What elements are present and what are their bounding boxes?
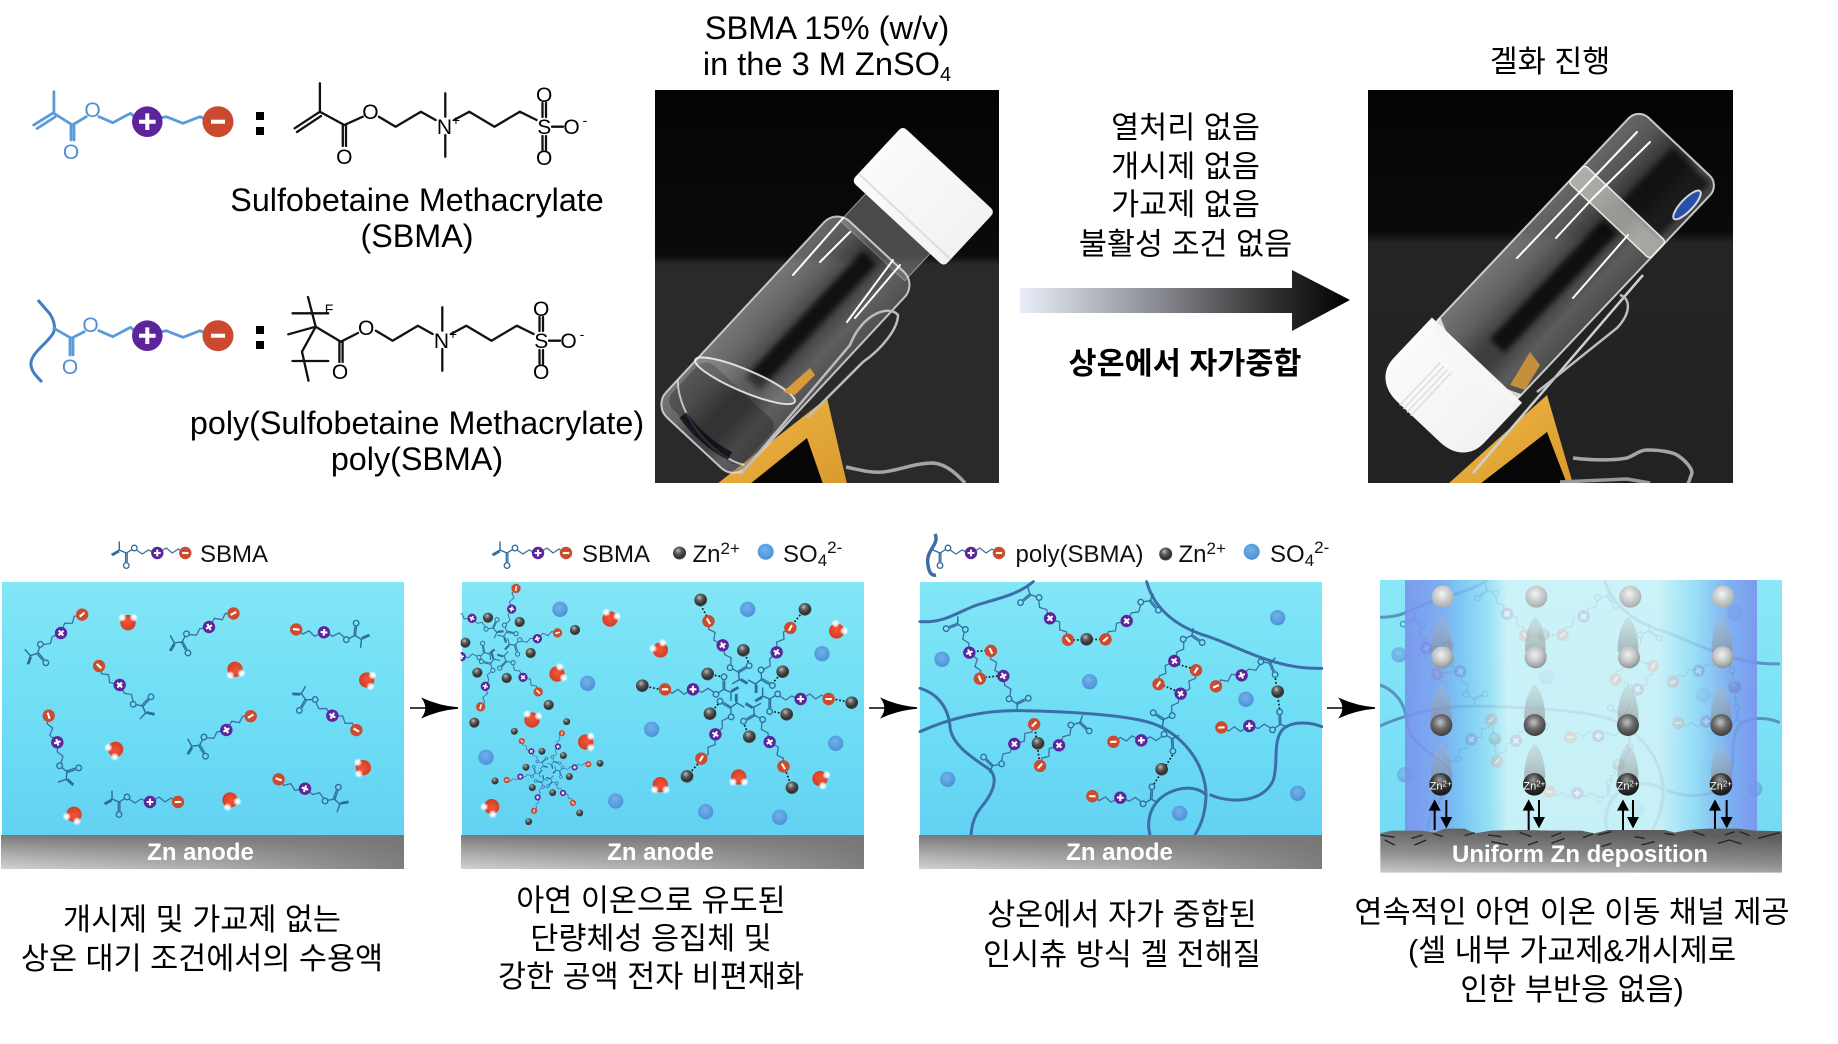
Zn ion columns <box>1380 586 1782 873</box>
legend: 2- <box>827 538 842 557</box>
Zn2+ balls: Zn <box>1430 781 1443 793</box>
heading: SBMA solution: 4 <box>940 64 951 86</box>
process conditions text: 불활성 조건 없음 <box>1079 228 1292 262</box>
SBMA skeletal formula: O <box>536 84 552 107</box>
Zn2+ balls: Zn <box>1710 781 1723 793</box>
process conditions text <box>1079 111 1292 262</box>
label: poly(Sulfobetaine Methacrylate): poly(SBMA) <box>331 441 503 477</box>
Zn anode: Zn anode <box>1066 839 1173 866</box>
photo: vial with liquid <box>648 90 999 486</box>
caption 3: 인시츄 방식 겔 전해질 <box>983 938 1261 972</box>
sulfate ions <box>934 610 1305 821</box>
large micelle <box>636 594 858 794</box>
tails <box>1431 617 1732 778</box>
legend: 4 <box>818 551 827 570</box>
caption 3: 상온에서 자가 중합된 <box>987 898 1257 932</box>
vial highlights <box>683 218 900 475</box>
SBMA skeletal formula: + <box>452 112 460 128</box>
second row <box>1431 646 1734 668</box>
polymer chains <box>920 582 1322 835</box>
label: poly(Sulfobetaine Methacrylate): poly(Sulfobetaine Methacrylate) <box>190 405 644 441</box>
vial highlights and clip wire <box>1473 132 1650 473</box>
micelles, ions and water <box>434 582 858 825</box>
arrow 2 <box>869 699 917 717</box>
medium micelle <box>460 584 580 728</box>
caption 4: (셀 내부 가교제&개시제로 <box>1408 934 1736 968</box>
process conditions text: 가교제 없음 <box>1111 188 1260 222</box>
caption 2: 단량체성 응집체 및 <box>530 922 772 956</box>
SBMA cartoon structure <box>34 92 234 164</box>
heading: SBMA solution: in the 3 M ZnSO <box>703 45 940 82</box>
caption 1: 상온 대기 조건에서의 수용액 <box>21 942 383 976</box>
arrow 1 <box>410 699 458 717</box>
Zn anode <box>461 835 864 869</box>
sulfate ions <box>478 602 843 825</box>
water molecules <box>478 607 850 820</box>
process conditions text: 열처리 없음 <box>1111 111 1260 145</box>
legend: 2+ <box>1207 539 1226 558</box>
SBMA skeletal formula: N <box>437 116 452 139</box>
polymer network with ions <box>920 582 1322 835</box>
Zn anode <box>1 835 404 869</box>
legend: SO <box>1270 541 1305 568</box>
legend: poly(SBMA) <box>1016 541 1144 568</box>
SBMA skeletal formula: O <box>336 146 352 169</box>
poly(SBMA) skeletal formula: O <box>358 317 374 340</box>
heading: gelation: 겔화 진행 <box>1490 45 1610 79</box>
process conditions text: 개시제 없음 <box>1111 150 1260 184</box>
caption 4: 연속적인 아연 이온 이동 채널 제공 <box>1354 896 1790 930</box>
Zn anode: Zn anode <box>607 839 714 866</box>
caption 1: 개시제 및 가교제 없는 <box>63 903 341 937</box>
legend: SO <box>783 541 818 568</box>
legend: SBMA <box>582 541 650 568</box>
poly(SBMA) skeletal formula: O <box>560 330 577 353</box>
legend: 2- <box>1314 538 1329 557</box>
poly(SBMA) skeletal formula: - <box>580 326 585 342</box>
SBMA cartoon structure: O <box>63 141 79 164</box>
Zn2+ balls: Zn <box>1523 781 1536 793</box>
poly(SBMA) skeletal formula: + <box>449 326 457 342</box>
zinc ions <box>1032 633 1284 776</box>
third row <box>1430 714 1732 736</box>
Zn2+ balls: Zn <box>1617 781 1630 793</box>
Zn2+ balls: 2+ <box>1630 780 1639 789</box>
legend: SBMA: SBMA <box>200 541 268 568</box>
heading: SBMA solution: SBMA 15% (w/v) <box>705 9 949 46</box>
water background <box>920 582 1322 835</box>
panel 4: uniform Zn deposition <box>1377 577 1782 873</box>
poly(SBMA) skeletal formula: S <box>534 330 548 353</box>
legend <box>492 538 842 570</box>
caption 2: 강한 공액 전자 비편재화 <box>498 960 804 994</box>
SBMA skeletal formula: O <box>362 101 379 124</box>
top row <box>1432 586 1734 608</box>
legend: Zn <box>1178 541 1207 568</box>
poly(SBMA) skeletal formula: N <box>434 330 449 353</box>
label: Sulfobetaine Methacrylate: Sulfobetaine Methacrylate <box>230 182 604 218</box>
SBMA skeletal formula: - <box>583 112 588 128</box>
poly(SBMA) skeletal formula: O <box>332 361 348 384</box>
top left: SBMA chemical structures <box>31 83 644 477</box>
SBMA skeletal formula: S <box>537 116 551 139</box>
poly(SBMA) cartoon structure: O <box>62 356 78 379</box>
legend <box>928 534 1329 575</box>
SBMA molecules and water <box>19 600 378 827</box>
SBMA cartoon structure: O <box>84 99 101 122</box>
legend: Zn <box>692 541 721 568</box>
poly(SBMA) cartoon structure: O <box>82 314 99 337</box>
SBMA skeletal formula: O <box>536 147 552 170</box>
water background <box>462 582 864 835</box>
SBMA skeletal formula: O <box>563 116 580 139</box>
caption 4: 인한 부반응 없음) <box>1460 973 1684 1007</box>
panel 2: Zn2+ induced micelle aggregates <box>434 538 864 869</box>
SBMA skeletal formula <box>295 83 588 170</box>
small micelle <box>492 718 603 825</box>
Zn2+ balls: 2+ <box>1443 780 1452 789</box>
poly(SBMA) cartoon structure <box>31 300 233 382</box>
arrow 3 <box>1327 699 1375 717</box>
legend: SBMA <box>111 541 268 568</box>
water background <box>1380 580 1782 835</box>
colon <box>256 112 264 135</box>
side chains <box>941 584 1288 807</box>
label: Uniform Zn deposition: Uniform Zn deposition <box>1452 841 1708 868</box>
poly(SBMA) skeletal formula: F <box>325 301 333 317</box>
ion channel glow <box>1380 580 1782 835</box>
poly(SBMA) skeletal formula <box>288 297 585 384</box>
panel 3: in situ gel electrolyte <box>919 534 1329 869</box>
colon <box>256 326 264 349</box>
photo: inverted vial with gel <box>1368 90 1733 484</box>
Zn2+ balls: 2+ <box>1536 780 1546 789</box>
caption 2: 아연 이온으로 유도된 <box>516 884 786 918</box>
water background <box>2 582 404 835</box>
poly(SBMA) skeletal formula: O <box>533 298 549 321</box>
poly(SBMA) skeletal formula: O <box>533 361 549 384</box>
gradient process arrow <box>1020 270 1350 331</box>
label: Sulfobetaine Methacrylate: (SBMA) <box>360 218 474 254</box>
up and down arrows <box>1429 799 1733 830</box>
panel 1: SBMA aqueous solution <box>1 541 404 869</box>
legend: 4 <box>1305 551 1314 570</box>
faded polymer network <box>1377 577 1779 830</box>
legend: 2+ <box>721 539 740 558</box>
Zn2+ balls <box>1429 773 1732 796</box>
Zn anode: Zn anode <box>147 839 254 866</box>
dotted interactions <box>973 639 1280 785</box>
label: self-polymerization at room temperature: 상온에서 자가중합 <box>1069 347 1301 381</box>
Zn anode <box>919 835 1322 869</box>
Zn2+ balls: 2+ <box>1723 780 1732 789</box>
deposited Zn surface <box>1380 829 1782 873</box>
